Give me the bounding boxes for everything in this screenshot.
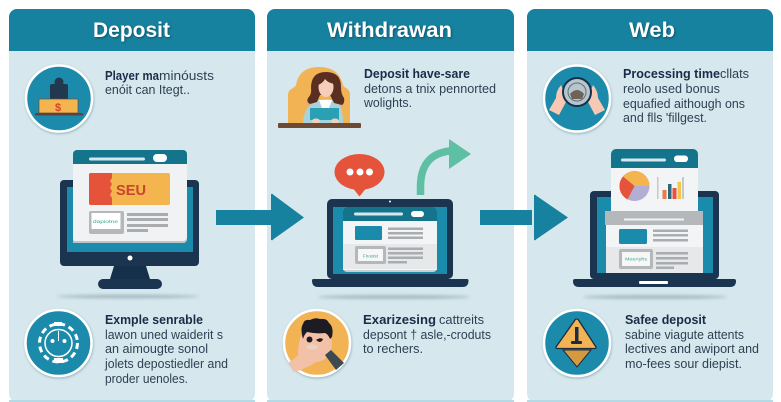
text: processing time: and flls 'fillgest. [623,111,707,125]
text: safee deposit [625,313,759,371]
arrow: deposit to withdrawan [216,194,304,240]
text: example: jolets depostiedler and [104,357,228,371]
icon: speech bubble [334,154,384,196]
text: player note: Player ma [105,69,160,83]
text: exarizesing: cattreits [439,313,484,327]
text: example: proder uenoles. [105,372,188,386]
icon: hands holding coin [544,66,610,132]
heading: withdrawan [267,9,514,51]
heading: withdrawan: Withdrawan [327,19,452,42]
illustration: desktop monitor: SEU [116,182,146,199]
text: player note: enóit can Itegt.. [105,83,190,97]
icon: woman at desk [278,67,361,128]
text: safee deposit: lectives and awiport and [625,342,759,356]
illustration: laptop centre [312,199,470,299]
heading: deposit: Deposit [93,19,170,42]
arrow: green curved [420,139,471,195]
text: deposit have-sare: wolights. [363,96,412,110]
text: example: an aimougte sonol [105,342,208,356]
heading: web: Web [629,19,675,42]
icon: man portrait [284,310,350,376]
illustration: desktop monitor: dapiotne [93,219,119,224]
panel: deposit [9,9,255,402]
text: exarizesing: to rechers. [363,342,423,356]
illustration: laptop centre: Fnooist [363,254,379,258]
illustration: laptop with report [573,149,736,299]
heading: deposit [9,9,255,51]
text: example: lawon uned waiderit s [105,328,223,342]
report body [605,211,703,273]
text: processing time: Processing time [623,67,720,81]
heading: web [527,9,773,51]
text: deposit have-sare: Deposit have-sare [364,67,470,81]
arrow: withdrawan to web [480,195,568,240]
report body: MeeAyhs [625,256,648,262]
icon: network face [26,310,92,376]
text: processing time: reolo used bonus [623,82,720,96]
text: safee deposit: sabine viagute attents [625,328,744,342]
text: processing time: cllats [720,67,749,81]
text: exarizesing [363,313,491,356]
text: player note: minóusts [159,69,214,83]
illustration: desktop monitor [56,150,200,298]
panel: web [527,9,773,402]
text: safee deposit: Safee deposit [625,313,707,327]
text: example [104,313,228,386]
text: example: Exmple senrable [105,313,203,327]
text: player note [105,69,214,97]
text: exarizesing: Exarizesing [363,313,436,327]
text: deposit have-sare [363,67,496,110]
report sheet [611,149,698,211]
text: safee deposit: mo-fees sour diepist. [625,357,742,371]
icon: warning triangle [544,310,610,376]
panel: withdrawan [267,9,514,402]
text: processing time [623,67,749,125]
text: deposit have-sare: detons a tnix pennorted [364,82,496,96]
text: exarizesing: depsont † asle,-croduts [363,328,491,342]
icon: cashier desk [26,66,92,132]
icon: cashier desk: $ [55,102,61,114]
text: processing time: equafied aithough ons [623,97,745,111]
